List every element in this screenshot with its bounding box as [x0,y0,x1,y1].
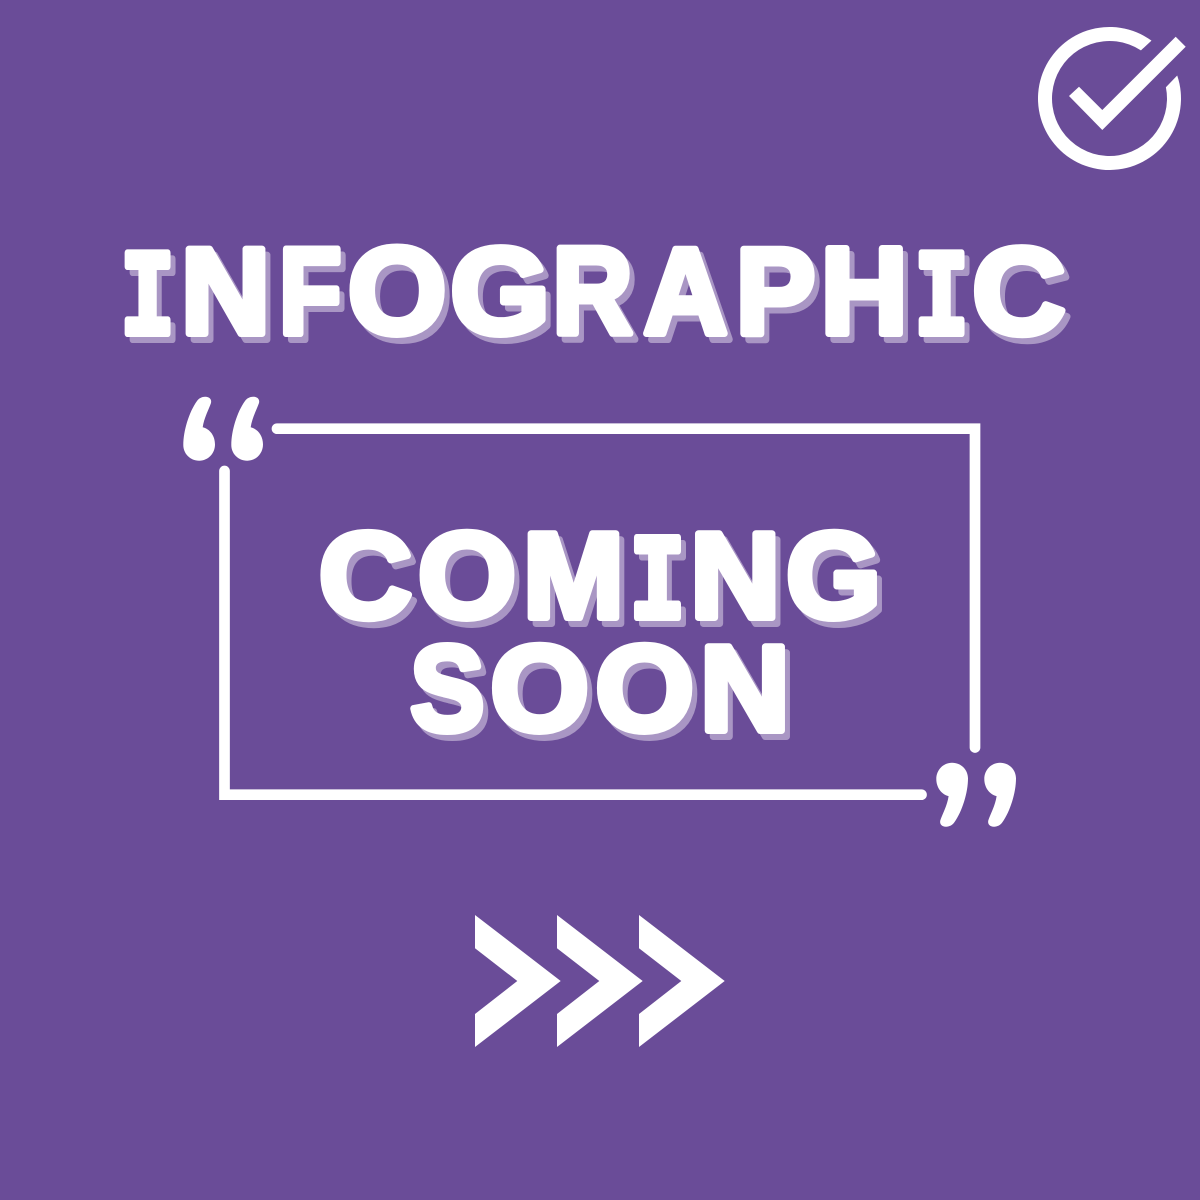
heading: SOON [410,620,790,757]
title: INFOGRAPHIC [120,222,1065,371]
heading: COMING [319,507,881,655]
heading: SOON: O [595,621,694,757]
heading: SOON: O [490,621,589,757]
title: INFOGRAPHIC: I [914,232,969,371]
heading: COMING: C [319,507,412,644]
icon: closing quotation mark [936,763,1016,827]
heading: COMING: I [630,516,685,655]
heading: SOON: S [410,620,484,757]
heading: SOON: N [700,622,790,757]
title: INFOGRAPHIC: O [348,223,446,360]
quote frame border [224,429,975,795]
title: INFOGRAPHIC: C [972,222,1065,360]
heading: COMING: N [690,508,780,644]
title: INFOGRAPHIC: F [279,223,342,360]
title: INFOGRAPHIC: R [552,222,633,360]
title: INFOGRAPHIC: I [120,232,175,371]
title: INFOGRAPHIC: N [181,223,270,360]
icon: check mark in circle [1038,27,1186,170]
icon: opening quotation mark [183,397,263,461]
title: INFOGRAPHIC: P [736,222,815,360]
heading: COMING: O [418,508,516,644]
heading: COMING: G [786,508,881,644]
heading: COMING: M [523,507,624,644]
title: INFOGRAPHIC: A [644,224,728,360]
icon: triple chevron arrows [475,915,725,1047]
title: INFOGRAPHIC: H [821,222,908,360]
title: INFOGRAPHIC: G [450,222,550,360]
